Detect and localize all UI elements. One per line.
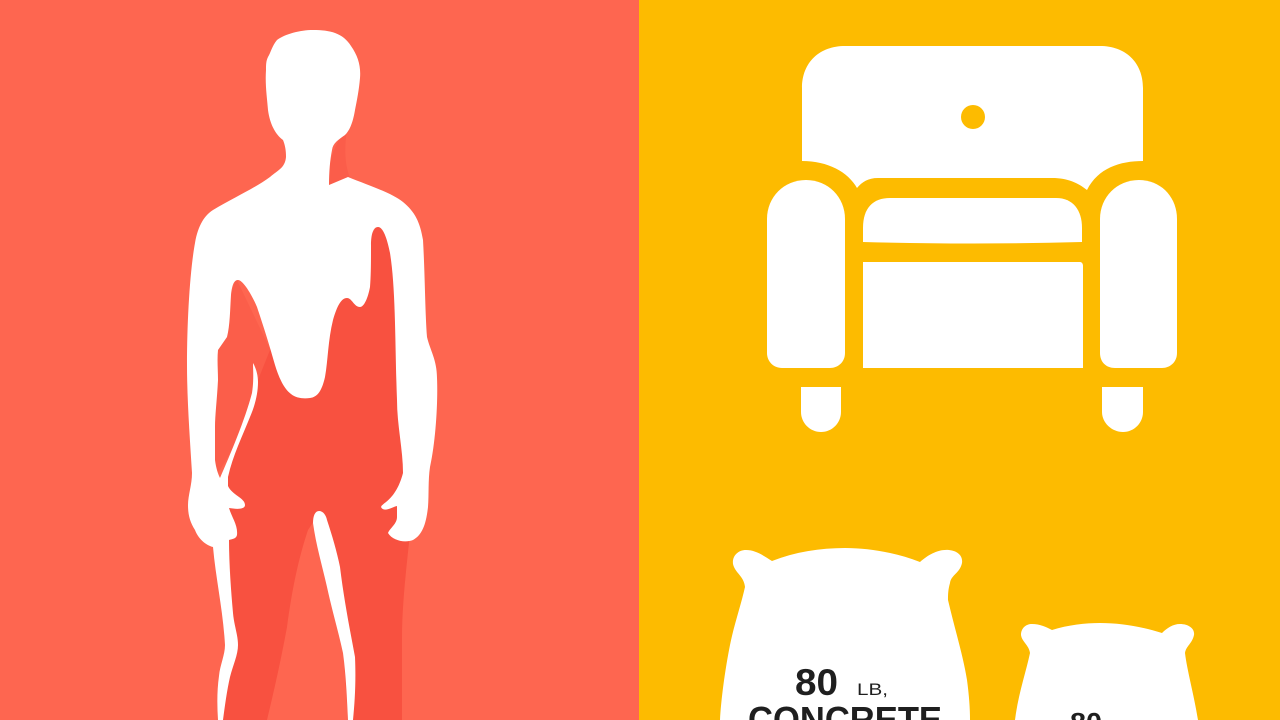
neck shadow xyxy=(326,130,350,190)
icon: person figure xyxy=(187,30,437,720)
right arm xyxy=(1100,180,1177,368)
large bag shape xyxy=(720,548,970,720)
left leg xyxy=(801,387,841,432)
panel: coral person xyxy=(0,0,639,720)
seat cushion xyxy=(863,198,1082,244)
icon: armchair xyxy=(767,46,1177,432)
large bag unit: LB, xyxy=(857,680,888,699)
gap between legs xyxy=(313,511,355,720)
chair back with button xyxy=(802,46,1143,190)
right leg xyxy=(1102,387,1143,432)
seat base xyxy=(863,262,1083,368)
area between left arm and torso xyxy=(214,278,280,480)
left arm xyxy=(767,180,845,368)
large bag weight: 80 xyxy=(795,662,838,703)
icon: large concrete bag xyxy=(720,548,970,720)
dark red body xyxy=(220,224,409,720)
small bag shape xyxy=(1015,623,1198,720)
icon: small concrete bag xyxy=(1015,623,1198,720)
panel: yellow objects xyxy=(639,0,1280,720)
person silhouette xyxy=(187,30,437,720)
